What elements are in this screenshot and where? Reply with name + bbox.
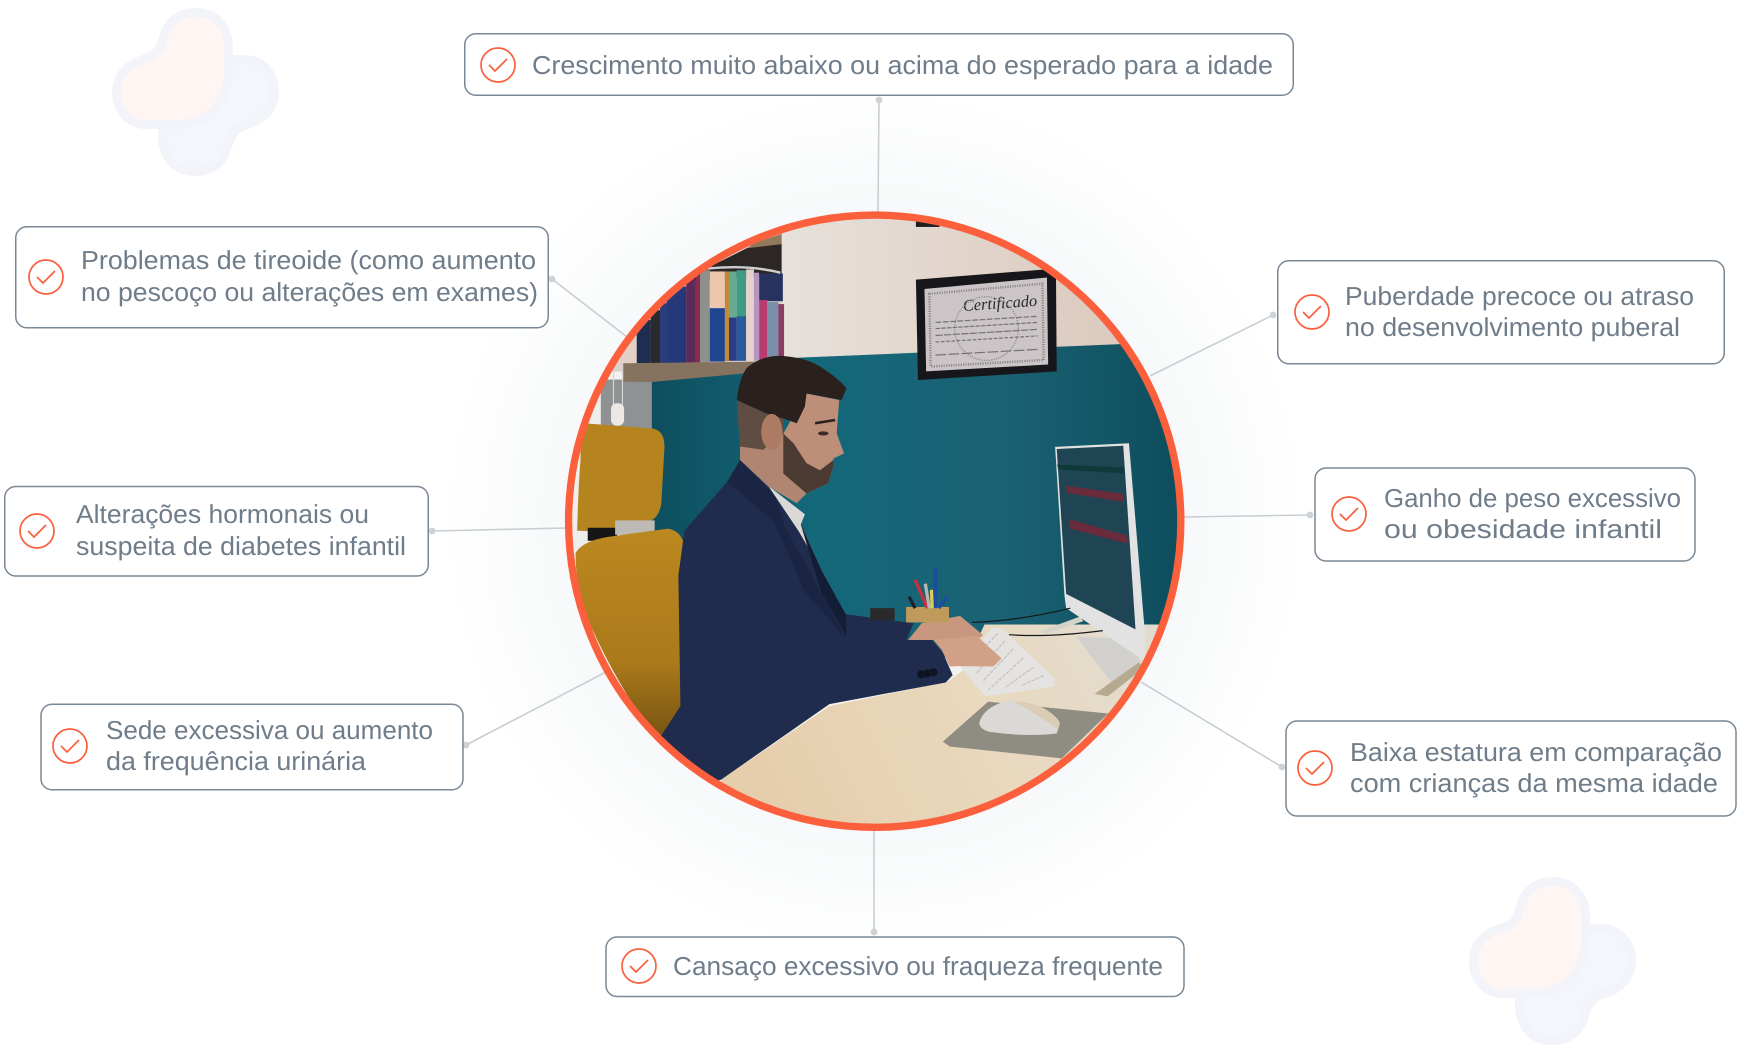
certificate frame (916, 220, 1057, 380)
text: Alterações hormonais (76, 499, 406, 561)
text: Ganho de peso (1384, 483, 1681, 544)
pen cup (870, 567, 949, 622)
card: Alterações hormonais (5, 486, 428, 576)
text: Cansaço excessivo: Cansaço excessivo ou fraqueza frequente (673, 951, 1163, 981)
hands (908, 616, 1002, 667)
glow behind photo (445, 91, 1305, 951)
text: Puberdade (1345, 281, 1694, 342)
icon: check (622, 949, 656, 983)
mouse pad (943, 702, 1108, 758)
books (619, 267, 784, 364)
decorative logo: top left (121, 17, 270, 167)
text: Alterações hormonais: Alterações hormonais ou (76, 499, 369, 529)
icon: check (20, 514, 54, 548)
text: Crescimento: Crescimento muito abaixo ou acima do esperado para a idade (532, 50, 1273, 80)
text: Sede excessiva: Sede excessiva ou aumento (106, 715, 433, 745)
decorative logo: bottom right (1478, 886, 1627, 1036)
mouse (979, 701, 1060, 735)
text: Baixa estatura (1350, 737, 1722, 798)
card: Baixa estatura (1286, 721, 1736, 816)
jacket (654, 460, 953, 792)
icon: check (29, 260, 63, 294)
text: Puberdade: Puberdade precoce ou atraso (1345, 281, 1694, 311)
text: Problemas de tireoide (81, 245, 538, 307)
monitor (1038, 443, 1145, 696)
teal wall (652, 341, 1200, 657)
connector lines (429, 97, 1313, 935)
shelf board (623, 362, 758, 382)
icon: check (481, 48, 515, 82)
card: Problemas de tireoide (16, 227, 548, 328)
photo ring (569, 215, 1181, 827)
cables (972, 608, 1103, 636)
desk (721, 624, 1159, 824)
head (737, 356, 847, 503)
keyboard (960, 628, 1054, 696)
text: Sede excessiva (106, 715, 433, 776)
icon: check (1332, 497, 1366, 531)
text: Alterações hormonais: suspeita de diabetes infantil (76, 531, 406, 561)
icon: check (1298, 751, 1332, 785)
text: Problemas de tireoide: no pescoço ou alterações em exames) (81, 277, 538, 307)
left window and blind strip (600, 366, 652, 535)
grey desk reflection (1076, 637, 1144, 682)
card: Cansaço excessivo (606, 937, 1184, 996)
circular photo: doctor at desk (560, 200, 1200, 840)
card: Sede excessiva (41, 704, 463, 790)
text: Baixa estatura: Baixa estatura em comparação (1350, 737, 1722, 767)
text: Ganho de peso: ou obesidade infantil (1384, 514, 1662, 544)
wall upper (782, 218, 1120, 358)
text: Puberdade: no desenvolvimento puberal (1345, 312, 1680, 342)
icon: check (1295, 295, 1329, 329)
text: Sede excessiva: da frequência urinária (106, 746, 367, 776)
card: Ganho de peso (1315, 468, 1695, 561)
upper shelf (612, 234, 782, 372)
icon: check (53, 729, 87, 763)
chair (576, 424, 687, 749)
text: Problemas de tireoide: Problemas de tireoide (como aumento (81, 245, 536, 275)
card: Puberdade (1278, 261, 1724, 364)
card: Crescimento (465, 34, 1293, 95)
certificate frame: Certificado (962, 291, 1038, 315)
text: Ganho de peso: Ganho de peso excessivo (1384, 483, 1681, 513)
text: Baixa estatura: com crianças da mesma idade (1350, 768, 1718, 798)
